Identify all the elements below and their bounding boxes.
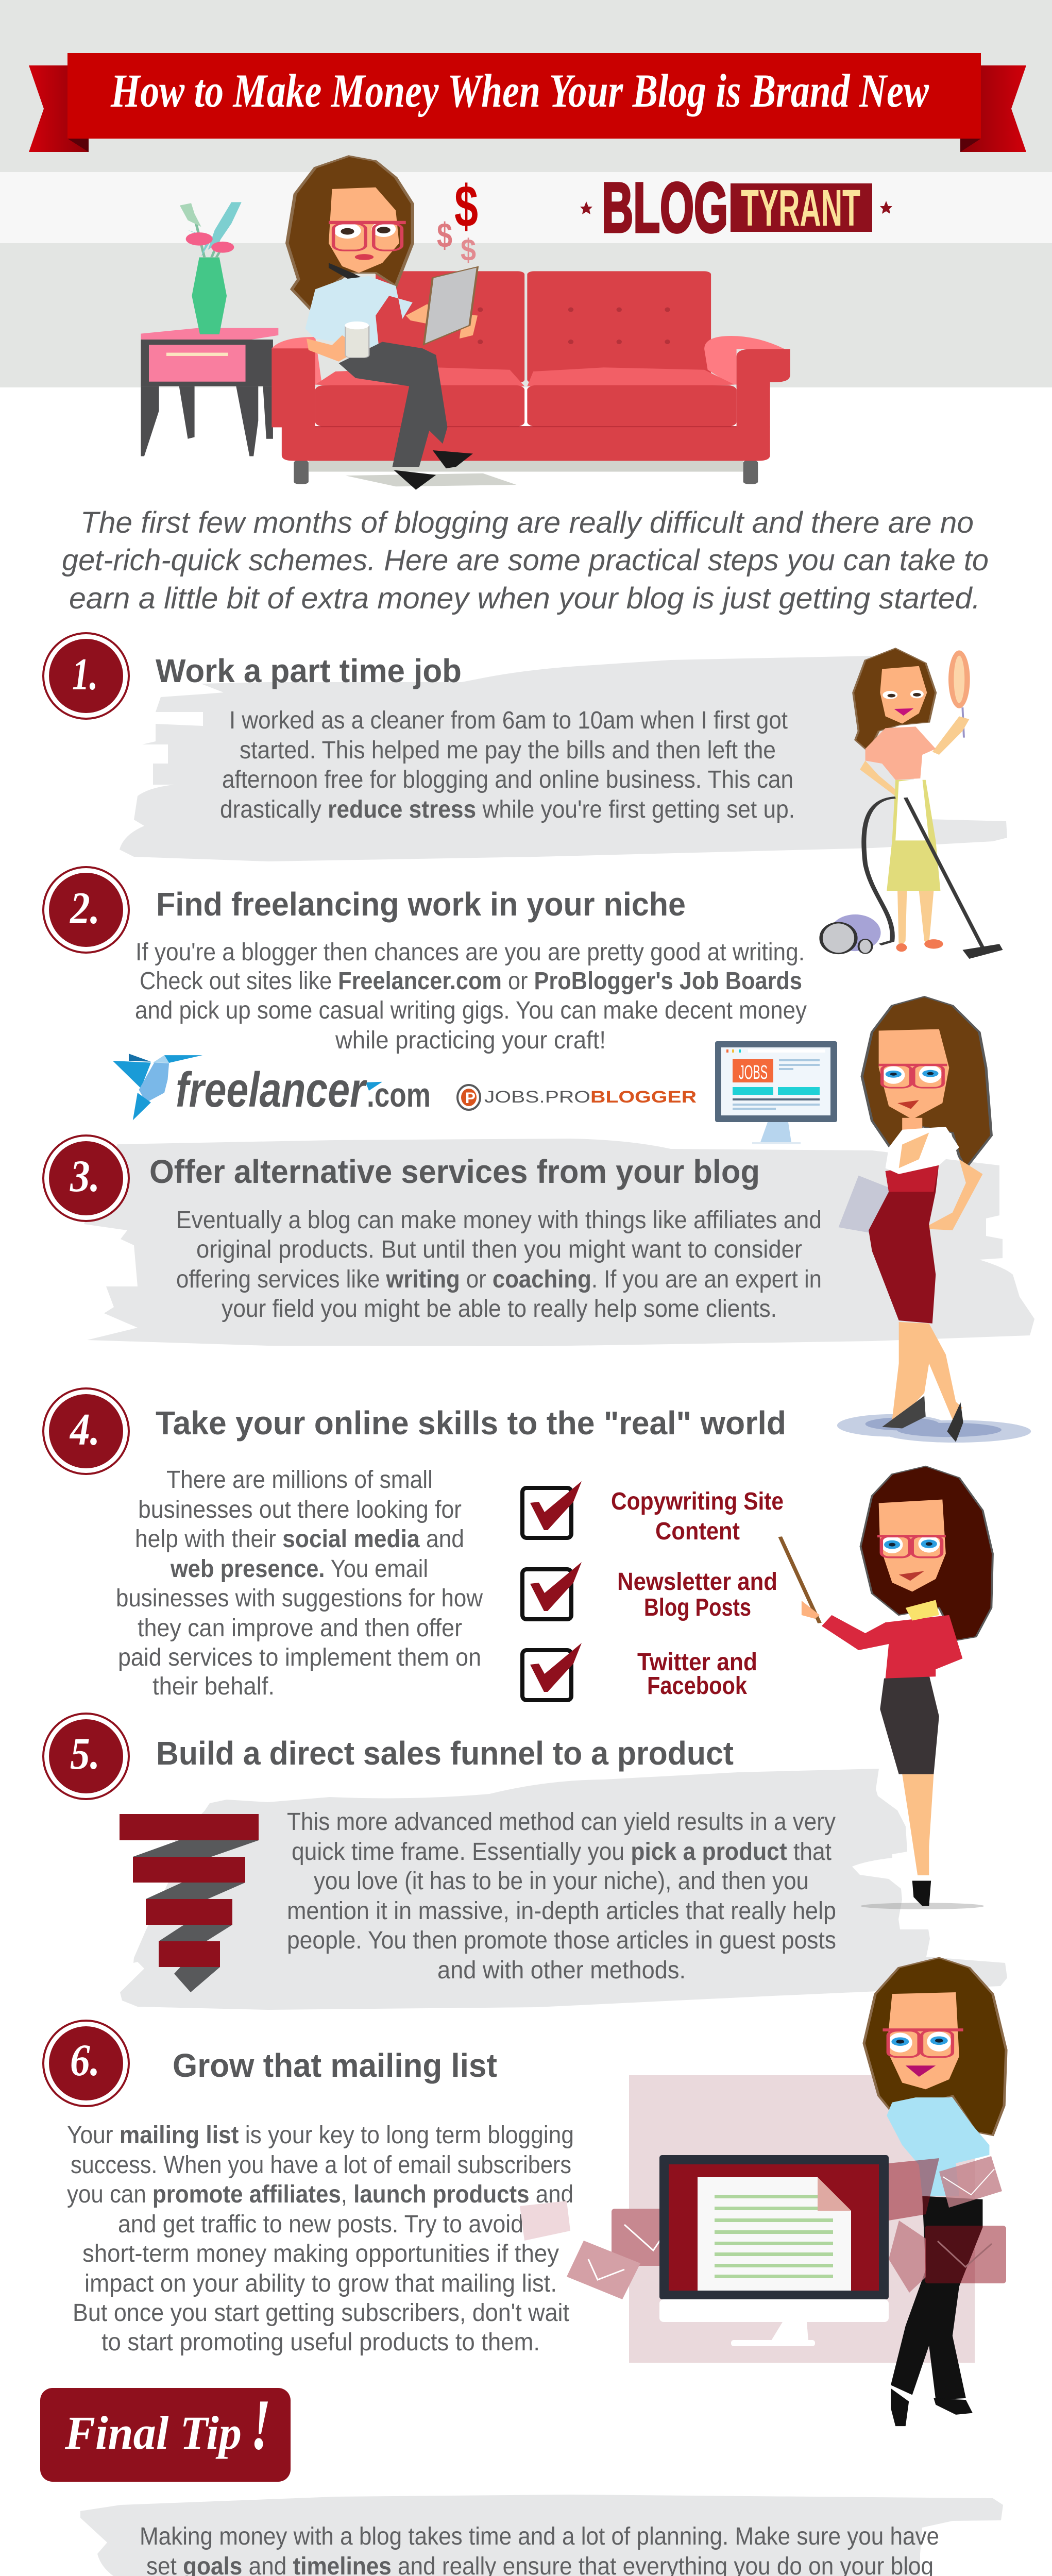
final tip badge: [40, 2385, 291, 2482]
step 5 text: This more advanced method can yield results in a very: [287, 1808, 836, 1836]
step 5 text: people. You then promote those articles in guest posts: [287, 1927, 836, 1954]
header background bands: [0, 0, 1052, 387]
illustration: email monitor with envelopes: [520, 2075, 975, 2363]
step 2 text: while practicing your craft!: [335, 1027, 606, 1054]
intro paragraph: earn a little bit of extra money when your blog is just getting started.: [69, 582, 980, 615]
final tip text: Making money with a blog takes time and a lot of planning. Make sure you have: [140, 2523, 939, 2550]
step 2 text: Check out sites like Freelancer.com or ProBlogger's Job Boards: [140, 968, 802, 995]
step 6 text: But once you start getting subscribers, don't wait: [73, 2299, 569, 2327]
step 4 text: their behalf.: [152, 1673, 275, 1700]
step 3 number badge: 3.: [70, 1151, 100, 1201]
step 4 text: paid services to implement them on: [118, 1644, 481, 1671]
illustration: woman in red dress with folder: [837, 996, 1031, 1443]
step 2 heading: Find freelancing work in your niche: [156, 886, 686, 923]
step 3 text: your field you might be able to really help some clients.: [222, 1295, 777, 1323]
step 4 text: [116, 1466, 483, 1700]
icon: jobs monitor: JOBS: [739, 1062, 768, 1083]
checklist labels: Twitter and: [637, 1649, 757, 1676]
step 5 number badge: 5.: [70, 1729, 100, 1779]
step 6 text: short-term money making opportunities if they: [82, 2240, 559, 2267]
panel: step 3 brush background: [84, 1139, 1034, 1346]
step 3 number badge: [42, 1134, 130, 1222]
step 4 text: help with their social media and: [135, 1526, 464, 1553]
step 3 text: offering services like writing or coaching. If you are an expert in: [176, 1266, 822, 1293]
checklist labels: [611, 1488, 784, 1700]
step 4 text: businesses with suggestions for how: [116, 1585, 483, 1612]
step 6 text: impact on your ability to grow that mailing list.: [84, 2270, 557, 2297]
final tip text: [140, 2523, 939, 2576]
step 5 number badge: [42, 1713, 130, 1800]
step 6 text: you can promote affiliates, launch products and: [67, 2181, 573, 2208]
step 4 number badge: 4.: [69, 1405, 100, 1455]
step 4 number badge: [42, 1387, 130, 1475]
step 4 text: they can improve and then offer: [138, 1615, 462, 1642]
logo: Blog Tyrant header: TYRANT: [741, 179, 860, 237]
step 1 heading: Work a part time job: [156, 652, 462, 689]
step 2 number badge: [42, 866, 130, 954]
intro paragraph: [62, 506, 989, 615]
illustration: sales funnel: [120, 1814, 259, 1992]
logo: freelancer.com: [113, 1054, 431, 1120]
panel: final tip brush background: [80, 2495, 1003, 2576]
step 6 text: Your mailing list is your key to long term blogging: [67, 2122, 574, 2149]
step 3 heading: Offer alternative services from your blog: [149, 1153, 760, 1190]
checklist labels: Facebook: [647, 1672, 747, 1700]
logo: jobs.problogger: BLOGGER: [590, 1088, 697, 1106]
step 1 text: I worked as a cleaner from 6am to 10am when I first got: [229, 707, 788, 734]
step 4 text: businesses out there looking for: [138, 1496, 462, 1523]
step 5 text: and with other methods.: [437, 1957, 686, 1984]
illustration: woman with vacuum cleaner: [821, 648, 1003, 959]
step 3 text: Eventually a blog can make money with things like affiliates and: [176, 1207, 822, 1234]
logo: jobs.problogger: JOBS.PRO: [484, 1088, 590, 1106]
step 5 heading: Build a direct sales funnel to a product: [156, 1735, 734, 1772]
step 4 text: web presence. You email: [170, 1555, 428, 1583]
step 6 text: and get traffic to new posts. Try to avoid: [118, 2211, 523, 2238]
step 2 number badge: 2.: [69, 884, 100, 934]
checkbox 3: [522, 1643, 582, 1700]
step 1 text: [220, 707, 795, 823]
step 2 text: If you're a blogger then chances are you are pretty good at writing.: [135, 939, 805, 966]
illustration: woman with crossed arms: [864, 1958, 1006, 2426]
checklist labels: Copywriting Site: [611, 1488, 784, 1515]
step 6 number badge: 6.: [70, 2036, 100, 2086]
step 5 text: [287, 1808, 836, 1984]
step 6 number badge: [42, 2020, 130, 2107]
illustration: red sofa: [272, 271, 790, 484]
illustration: side table with vase: [141, 202, 278, 456]
logo: Blog Tyrant header: [580, 168, 892, 247]
step 5 text: quick time frame. Essentially you pick a product that: [292, 1838, 832, 1866]
icon: jobs monitor: [715, 1041, 837, 1144]
logo: jobs.problogger: P: [465, 1090, 476, 1107]
checkbox 1: [522, 1481, 582, 1538]
illustration: woman with pointer: [780, 1466, 993, 1909]
panel: step 1 brush background: [120, 656, 1007, 861]
final tip badge: Final Tip: [64, 2406, 242, 2459]
logo: freelancer.com: freelancer: [176, 1062, 367, 1117]
dollar signs: $: [437, 216, 452, 255]
final tip badge: !: [250, 2385, 271, 2465]
dollar signs: $: [461, 233, 476, 267]
step 1 number badge: [42, 632, 130, 720]
checklist: [522, 1481, 784, 1700]
title ribbon: [29, 53, 1026, 152]
step 6 heading: Grow that mailing list: [173, 2047, 497, 2084]
checkbox 2: [522, 1562, 582, 1619]
logo: freelancer.com: .com: [367, 1076, 431, 1114]
step 1 text: drastically reduce stress while you're first getting set up.: [220, 796, 795, 823]
checklist labels: Blog Posts: [644, 1594, 751, 1621]
logo: Blog Tyrant header: BLOG: [602, 168, 728, 247]
step 4 heading: Take your online skills to the "real" world: [156, 1404, 786, 1442]
step 4 text: There are millions of small: [166, 1466, 433, 1494]
intro paragraph: get-rich-quick schemes. Here are some practical steps you can take to: [62, 544, 989, 577]
step 5 text: you love (it has to be in your niche), and then you: [314, 1868, 809, 1895]
checklist labels: Content: [655, 1518, 740, 1545]
step 5 text: mention it in massive, in-depth articles that really help: [287, 1897, 836, 1925]
dollar signs: [437, 174, 478, 267]
step 3 text: original products. But until then you might want to consider: [196, 1236, 802, 1263]
step 1 text: started. This helped me pay the bills and then left the: [240, 737, 776, 764]
illustration: woman with tablet on sofa: [287, 156, 517, 490]
step 2 text: [135, 939, 807, 1054]
checklist labels: Newsletter and: [617, 1568, 777, 1596]
logo: jobs.problogger: [457, 1085, 697, 1110]
step 2 text: and pick up some casual writing gigs. You can make decent money: [135, 997, 807, 1024]
step 1 number badge: 1.: [72, 650, 98, 700]
dollar signs: $: [454, 174, 478, 240]
step 6 text: to start promoting useful products to them.: [101, 2329, 540, 2356]
step 6 text: success. When you have a lot of email subscribers: [71, 2151, 571, 2179]
envelopes over woman: [889, 2156, 1006, 2293]
step 1 text: afternoon free for blogging and online business. This can: [222, 766, 793, 793]
panel: step 5 brush background: [120, 1769, 1007, 2010]
step 3 text: [176, 1207, 822, 1323]
step 6 text: [67, 2122, 574, 2356]
intro paragraph: The first few months of blogging are really difficult and there are no: [80, 506, 974, 539]
